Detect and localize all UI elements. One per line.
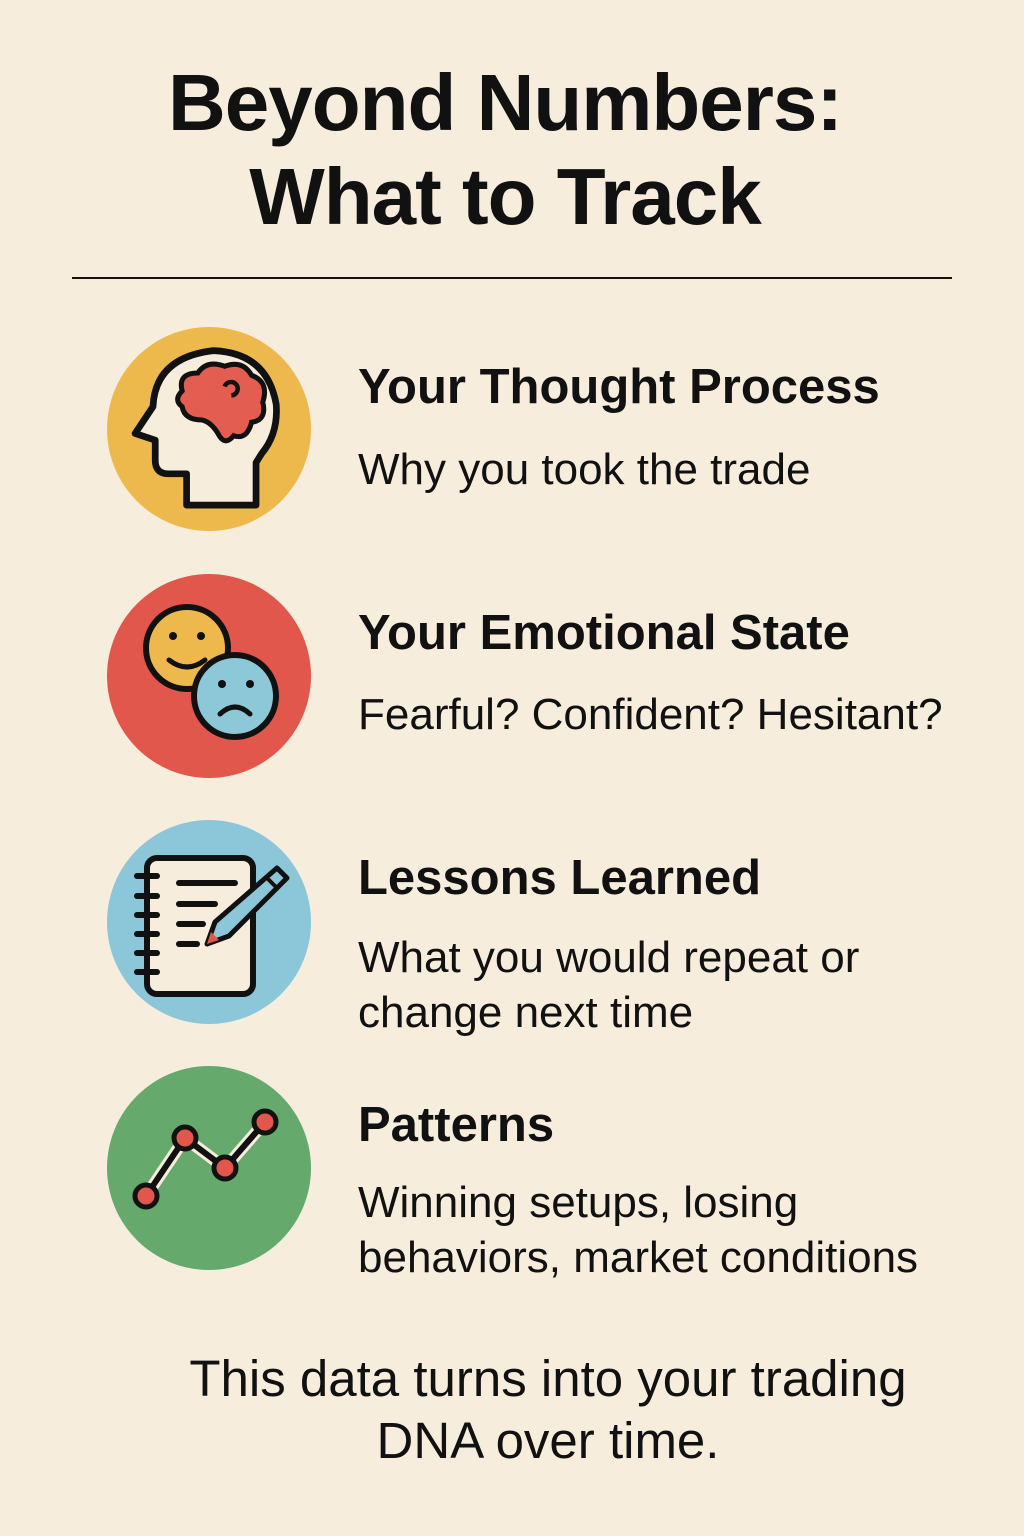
- footer text: This data turns into your trading: [189, 1350, 907, 1407]
- heading: thought process: Your Thought Process: [358, 360, 880, 414]
- footer text: [189, 1350, 907, 1469]
- icon: emotions: [107, 574, 311, 778]
- title: What to Track: [249, 152, 761, 241]
- text: lessons learned: What you would repeat or: [358, 933, 859, 982]
- footer text: DNA over time.: [377, 1412, 719, 1469]
- text: lessons learned: [358, 933, 859, 1037]
- heading: lessons learned: Lessons Learned: [358, 851, 761, 905]
- icon: head with brain: [107, 327, 311, 531]
- title: [168, 58, 842, 241]
- heading: patterns: Patterns: [358, 1098, 554, 1152]
- text: patterns: Winning setups, losing: [358, 1178, 798, 1227]
- text: emotional state: Fearful? Confident? Hesitant?: [358, 690, 943, 739]
- icon: line chart: [107, 1066, 311, 1270]
- text: lessons learned: change next time: [358, 988, 693, 1037]
- heading: emotional state: Your Emotional State: [358, 606, 850, 660]
- text: patterns: [358, 1178, 918, 1282]
- text: thought process: Why you took the trade: [358, 445, 810, 494]
- icon: notebook and pencil: [107, 820, 311, 1024]
- title: Beyond Numbers:: [168, 58, 842, 147]
- text: patterns: behaviors, market conditions: [358, 1233, 918, 1282]
